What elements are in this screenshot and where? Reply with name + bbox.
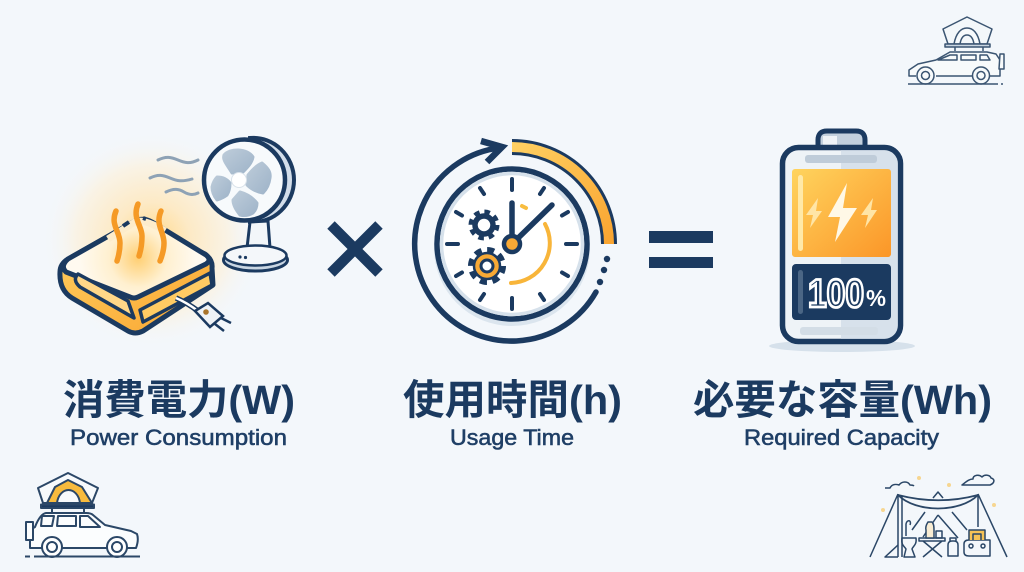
tarp and poles bbox=[898, 495, 978, 508]
label: power consumption: 消費電力(W) bbox=[63, 377, 295, 423]
label: required capacity: 必要な容量(Wh) bbox=[693, 377, 992, 423]
display readout: % bbox=[866, 285, 886, 311]
clock shadow bbox=[434, 170, 590, 326]
battery shadow bbox=[769, 340, 915, 352]
elapsed arc bbox=[522, 206, 526, 208]
icon: car with roof tent, top right bbox=[908, 17, 1004, 84]
clouds bbox=[885, 482, 914, 488]
air waves bbox=[150, 157, 198, 194]
icon: clock with cycle arrow bbox=[415, 141, 610, 341]
battery cap bbox=[818, 131, 865, 148]
display readout: 100 bbox=[808, 272, 864, 316]
label: power consumption bbox=[63, 377, 295, 450]
label: usage time: Usage Time bbox=[450, 425, 574, 450]
charge panel bbox=[792, 169, 891, 257]
battery body bbox=[782, 148, 900, 342]
progress arc bbox=[512, 147, 609, 244]
label: usage time bbox=[403, 377, 622, 450]
clock face bbox=[437, 169, 587, 319]
gear: orange bbox=[471, 250, 503, 282]
clock hands bbox=[504, 203, 552, 252]
gear: navy bbox=[472, 212, 496, 238]
label: usage time: 使用時間(h) bbox=[403, 377, 622, 423]
cycle arrow bbox=[415, 148, 596, 341]
lightning bolts bbox=[806, 183, 877, 242]
label: required capacity bbox=[693, 377, 992, 450]
icon: heated blanket and fan bbox=[42, 132, 294, 348]
blanket bbox=[60, 218, 213, 333]
heat waves bbox=[114, 204, 164, 261]
operator: multiply bbox=[331, 225, 379, 273]
cooler box bbox=[964, 540, 990, 556]
dots bbox=[597, 256, 610, 285]
fan bbox=[204, 138, 294, 271]
table and kettle bbox=[919, 538, 945, 557]
display bbox=[792, 264, 891, 320]
icon: camp tarp scene, bottom right bbox=[870, 475, 1007, 557]
plug and cable bbox=[176, 298, 231, 331]
stars bbox=[881, 476, 996, 512]
icon: car with roof tent, bottom left bbox=[25, 473, 140, 557]
icon: battery bbox=[769, 131, 915, 352]
jug bbox=[948, 538, 958, 556]
heat glow bbox=[42, 132, 262, 348]
sink stand bbox=[902, 521, 916, 557]
label: power consumption: Power Consumption bbox=[70, 425, 287, 450]
hour ticks bbox=[447, 179, 577, 309]
label: required capacity: Required Capacity bbox=[744, 425, 939, 450]
operator: equals bbox=[649, 231, 713, 268]
